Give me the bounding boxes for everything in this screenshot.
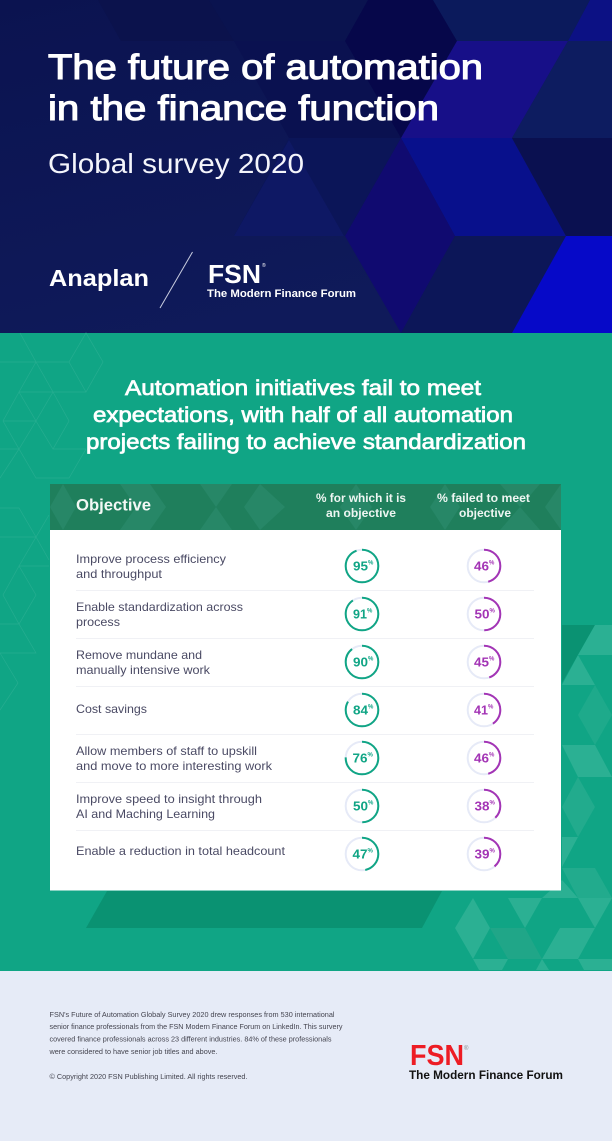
row: upskill staff: Allow members of staff to upskill <box>76 744 257 758</box>
row: upskill staff: 46 <box>474 750 489 766</box>
row: remove mundane work: Remove mundane and <box>76 648 202 662</box>
footer survey note: senior finance professionals from the FSN Modern Finance Forum on LinkedIn. This survery <box>50 1024 343 1031</box>
row: enable standardization: 50 <box>474 606 490 622</box>
row: remove mundane work: 90 <box>353 654 368 670</box>
row: cost savings: Cost savings <box>76 702 147 716</box>
logo: Anaplan: Anaplan <box>49 265 149 291</box>
table header: % for which it is <box>316 491 406 505</box>
row: speed to insight: 38 <box>474 798 490 814</box>
row: enable standardization: Enable standardization across <box>76 600 243 614</box>
row: cost savings: 41 <box>474 702 488 718</box>
table header: % failed to meet <box>437 491 530 505</box>
row: upskill staff: % <box>489 752 495 758</box>
panel: green section background <box>0 333 612 971</box>
heading: section headline: Automation initiatives fail to meet <box>125 377 481 400</box>
table header <box>50 484 561 530</box>
logo: FSN red: FSN <box>410 1040 464 1072</box>
row: enable standardization: % <box>490 608 496 614</box>
logo: FSN white: FSN <box>208 259 261 289</box>
logo: FSN red: ® <box>464 1045 469 1052</box>
logo: FSN white <box>207 259 356 300</box>
heading: section headline: expectations, with half of all automation <box>93 404 513 427</box>
row: cost savings: % <box>368 704 374 710</box>
panel: table card <box>50 484 561 890</box>
row: upskill staff: 76 <box>352 750 368 766</box>
row: headcount reduction <box>76 838 500 870</box>
footer survey note: FSN's Future of Automation Globaly Survey 2020 drew responses from 530 international <box>50 1012 335 1019</box>
row: speed to insight: Improve speed to insight through <box>76 792 262 806</box>
row: remove mundane work: % <box>489 656 495 662</box>
row: improve process efficiency: % <box>489 560 495 566</box>
logo: FSN white: ® <box>262 262 266 269</box>
row: improve process efficiency: 95 <box>353 558 368 574</box>
row: upskill staff: and move to more interesting work <box>76 759 273 773</box>
logo: FSN red <box>409 1040 563 1082</box>
logo: FSN red: The Modern Finance Forum <box>409 1068 563 1082</box>
row: enable standardization: 91 <box>353 606 367 622</box>
row: enable standardization <box>76 598 500 630</box>
row: cost savings: % <box>488 704 494 710</box>
row: speed to insight: AI and Maching Learning <box>76 807 215 821</box>
row: headcount reduction: 47 <box>352 846 368 862</box>
row: remove mundane work: manually intensive work <box>76 663 211 677</box>
logo divider slash <box>160 252 192 308</box>
row: remove mundane work: 45 <box>474 654 489 670</box>
row: enable standardization: % <box>367 608 373 614</box>
table header: objective <box>459 506 511 520</box>
row: cost savings: 84 <box>353 702 369 718</box>
title: The future of automation <box>48 48 483 87</box>
footer survey note <box>48 1012 343 1056</box>
row: upskill staff <box>76 742 500 774</box>
table header: Objective <box>76 496 151 514</box>
heading: section headline: projects failing to achieve standardization <box>86 431 526 454</box>
footer survey note: were considered to have senior job titles and above. <box>48 1049 218 1056</box>
row: headcount reduction: % <box>368 848 374 854</box>
row: cost savings <box>76 694 500 726</box>
row: improve process efficiency: Improve process efficiency <box>76 552 226 566</box>
row: headcount reduction: % <box>490 848 496 854</box>
row: enable standardization: process <box>76 615 120 629</box>
row: upskill staff: % <box>368 752 374 758</box>
row: improve process efficiency <box>76 550 500 582</box>
title <box>48 48 483 128</box>
row: headcount reduction: Enable a reduction in total headcount <box>76 844 286 858</box>
logo: FSN white: The Modern Finance Forum <box>207 288 356 300</box>
heading: section headline <box>86 377 526 454</box>
title: in the finance function <box>48 89 439 128</box>
row: improve process efficiency: 46 <box>474 558 489 574</box>
subtitle: Global survey 2020 <box>48 148 304 179</box>
row: improve process efficiency: and throughput <box>76 567 163 581</box>
row: speed to insight <box>76 790 500 822</box>
row: improve process efficiency: % <box>368 560 374 566</box>
panel: footer <box>0 971 612 1141</box>
row: remove mundane work: % <box>368 656 374 662</box>
footer survey note: covered finance professionals across 23 different industries. 84% of these professionals <box>50 1036 332 1044</box>
row: headcount reduction: 39 <box>474 846 490 862</box>
row: speed to insight: % <box>368 800 374 806</box>
row: remove mundane work <box>76 646 500 678</box>
row: speed to insight: % <box>490 800 496 806</box>
panel: header background <box>0 0 612 333</box>
row: speed to insight: 50 <box>353 798 368 814</box>
footer copyright: © Copyright 2020 FSN Publishing Limited. All rights reserved. <box>50 1073 248 1081</box>
table header: an objective <box>326 506 396 520</box>
